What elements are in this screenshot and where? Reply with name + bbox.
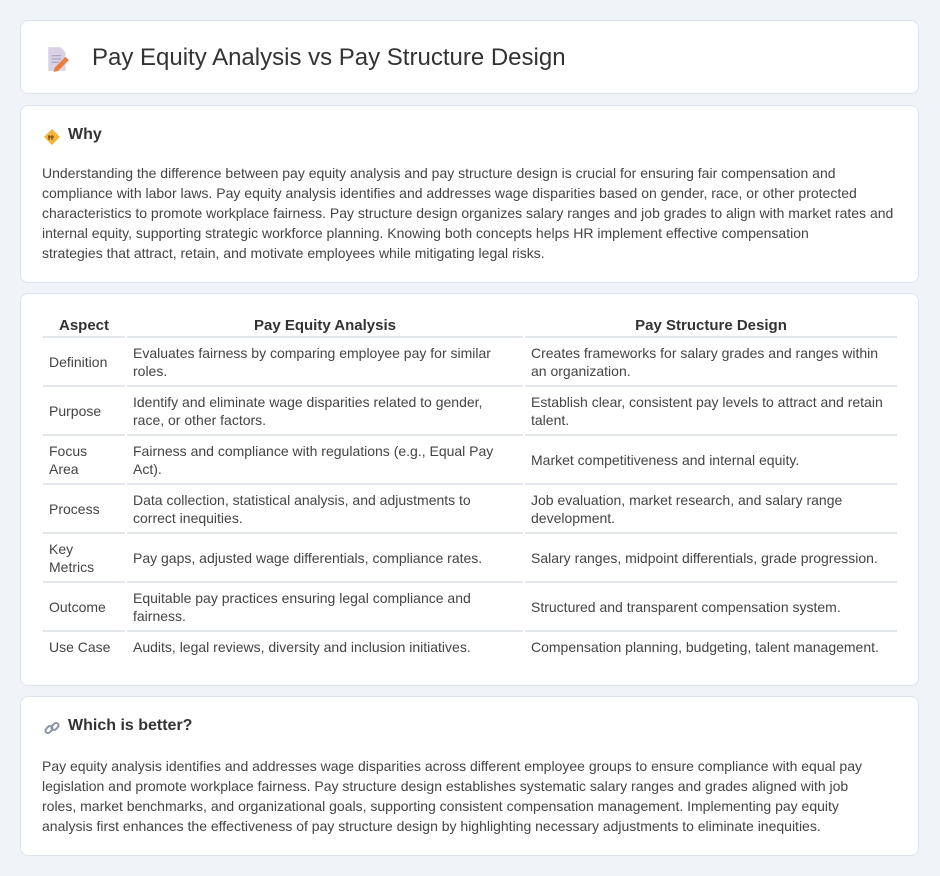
table: Aspect [59,316,109,334]
table: Job evaluation, market research, and salary range development. [531,492,842,526]
table: Structured and transparent compensation system. [531,598,841,614]
text: which is better: analysis first enhances the effectiveness of pay structure design by highlighting necessary adjustments to eliminate inequities. [42,818,821,834]
table: Establish clear, consistent pay levels to attract and retain talent. [531,394,883,428]
panel: comparison table [20,293,919,686]
table: Equitable pay practices ensuring legal compliance and fairness. [133,590,471,624]
icon: diamond [44,129,60,145]
table: Process [49,500,100,516]
icon: document [48,47,69,72]
table: Audits, legal reviews, diversity and inclusion initiatives. [133,639,471,655]
text: which is better [42,758,862,834]
text: which is better: legislation and promote workplace fairness. Pay structure design establishes systematic salary ranges and grades aligned with job [42,778,848,794]
text: which is better: roles, market benchmarks, and organizational goals, supporting consistent compensation management. Implementing pay equity [42,798,839,814]
heading: which is better: Which is better? [68,717,192,734]
text: which is better: Pay equity analysis identifies and addresses wage disparities across different employee groups to ensure compliance with equal pay [42,758,862,774]
title: Pay Equity Analysis vs Pay Structure Design [92,44,566,71]
panel: which is better [20,696,919,856]
table: Market competitiveness and internal equity. [531,452,799,468]
table: Fairness and compliance with regulations (e.g., Equal Pay Act). [133,442,493,476]
heading: why: Why [68,126,102,143]
text: why: compliance with labor laws. Pay equity analysis identifies and addresses wage disparities based on gender, race, or other protected [42,185,857,201]
table: Use Case [49,639,110,655]
table: Outcome [49,598,106,614]
table: Creates frameworks for salary grades and ranges within an organization. [531,344,878,378]
text: why [42,165,893,261]
table: Identify and eliminate wage disparities related to gender, race, or other factors. [133,394,482,428]
icon: link [44,722,60,734]
table: Data collection, statistical analysis, and adjustments to correct inequities. [133,492,471,526]
table: Key Metrics [49,540,94,574]
table: Definition [49,354,107,370]
table: Evaluates fairness by comparing employee pay for similar roles. [133,344,491,378]
table [43,316,897,655]
table: Pay gaps, adjusted wage differentials, compliance rates. [133,550,482,566]
text: why: Understanding the difference between pay equity analysis and pay structure design is crucial for ensuring fair compensation and [42,165,836,181]
table: Pay Structure Design [635,316,787,334]
table: Purpose [49,402,101,418]
table: Focus Area [49,442,87,476]
table: Salary ranges, midpoint differentials, grade progression. [531,550,878,566]
panel: why [20,105,919,283]
text: why: characteristics to promote workplace fairness. Pay structure design organizes salary ranges and job grades to align with market rates and [42,205,893,221]
table: Pay Equity Analysis [254,316,396,334]
header card [20,20,919,94]
table: Compensation planning, budgeting, talent management. [531,639,879,655]
text: why: strategies that attract, retain, and motivate employees while mitigating legal risks. [42,245,545,261]
text: why: internal equity, supporting strategic workforce planning. Knowing both concepts helps HR implement effective compensation [42,225,809,241]
